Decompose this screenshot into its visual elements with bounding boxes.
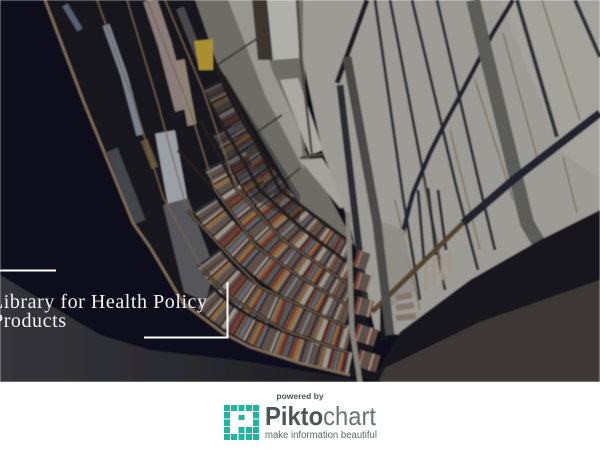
- window lower section with distant shelves: [372, 188, 463, 340]
- rows of books: [205, 85, 378, 364]
- lower left wall: [0, 275, 372, 382]
- window wall: [303, 0, 600, 335]
- ceiling panels: [195, 0, 355, 245]
- title frame: [0, 270, 228, 338]
- upper shelves with pale books: [65, 0, 200, 222]
- powered by label: powered by: [276, 391, 324, 401]
- dark pillars: [340, 57, 390, 335]
- shelf boards: [45, 0, 350, 375]
- dark floor and lower right wall: [372, 210, 600, 382]
- shadow over upper books: [200, 70, 300, 225]
- icon: Piktochart logo: [224, 405, 259, 440]
- footer: powered by Piktochart: [0, 382, 600, 450]
- title: [0, 291, 207, 332]
- icon: yellow book: [194, 39, 213, 70]
- wordmark: Piktochart: [265, 401, 377, 431]
- bookshelf base: [45, 0, 380, 382]
- ladder rail: [348, 212, 360, 382]
- tagline: make information beautiful: [265, 430, 377, 441]
- grey stacked books: [163, 198, 214, 302]
